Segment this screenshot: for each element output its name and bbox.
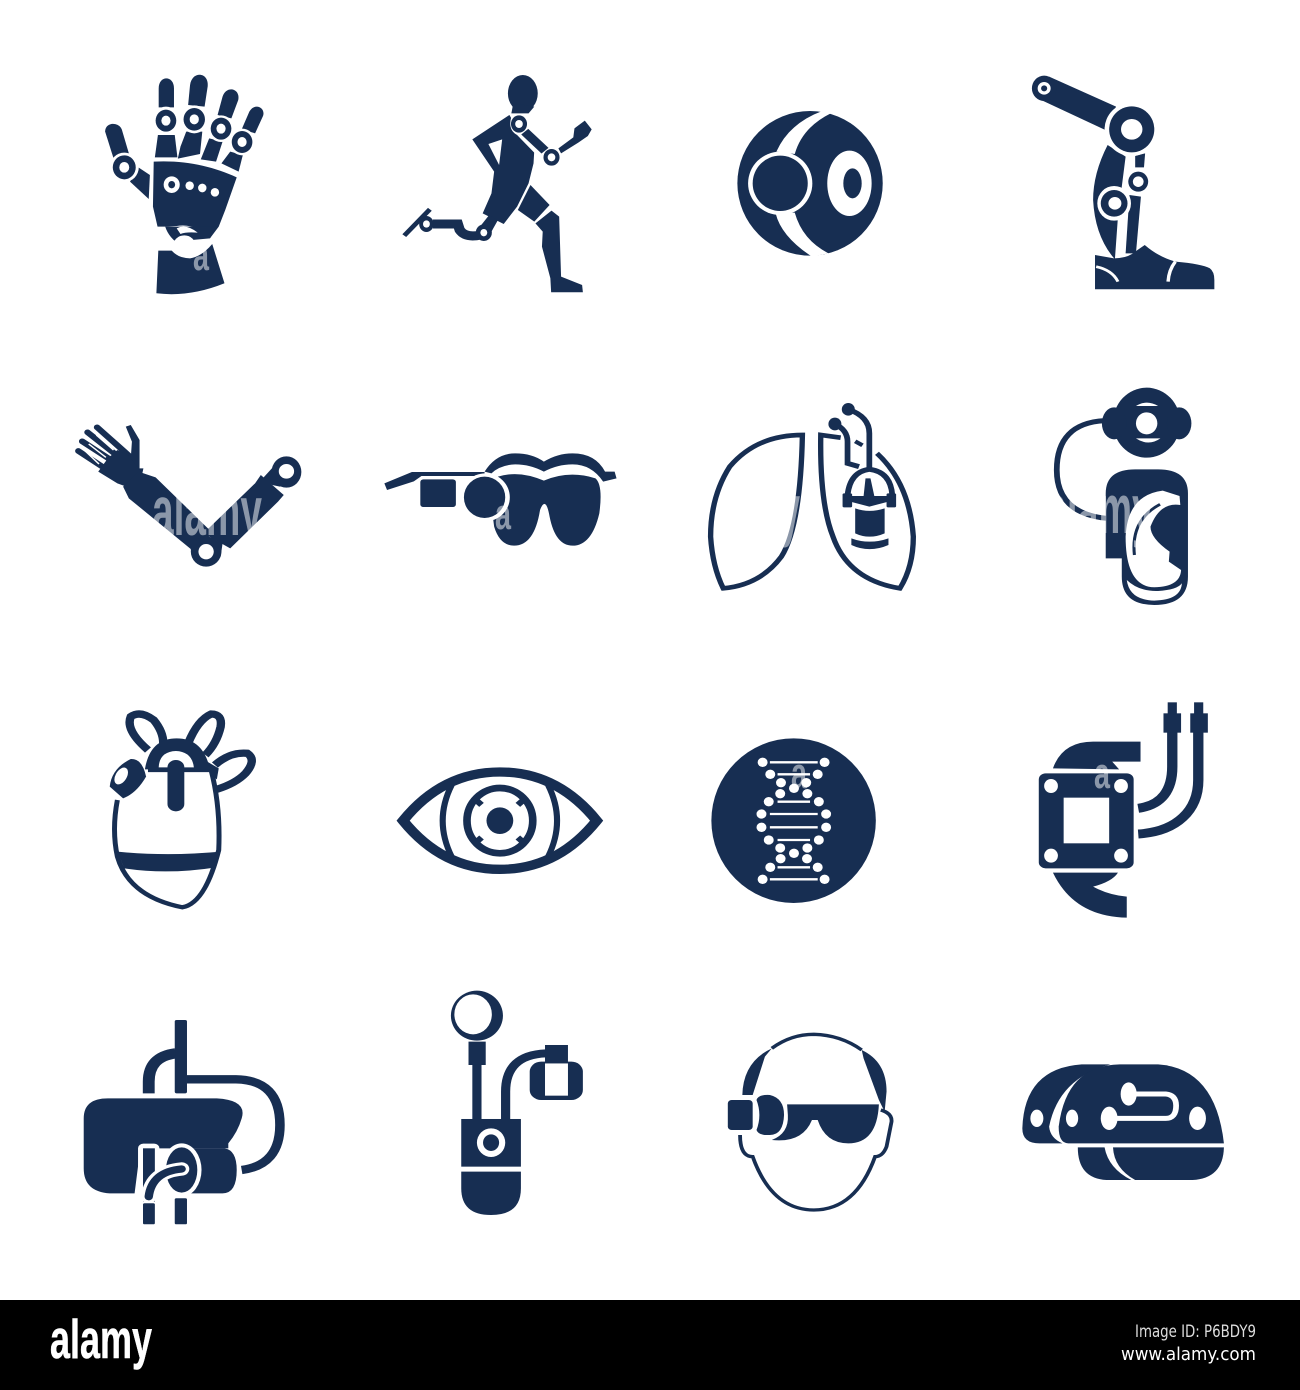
image id: Image ID: P6BDY9 bbox=[1135, 1322, 1256, 1342]
icon: smart helmet bbox=[1022, 1064, 1224, 1180]
website: www.alamy.com bbox=[1121, 1344, 1256, 1365]
watermark overlay: alamy bbox=[1046, 470, 1153, 548]
icon: artificial stomach with tubes bbox=[84, 1020, 280, 1224]
watermark overlay: a bbox=[193, 231, 209, 280]
icon: cochlear implant bbox=[1057, 388, 1191, 605]
watermark overlay: alamy bbox=[152, 472, 262, 550]
icon: artificial heart bbox=[110, 714, 252, 907]
icon: bionic eyeball bbox=[737, 111, 883, 257]
icon: smart glasses bbox=[384, 453, 617, 546]
footer logo: alamy bbox=[50, 1308, 152, 1370]
icon: lungs with implant bbox=[711, 403, 913, 588]
icon: robotic arm bbox=[78, 425, 301, 567]
icon: head with VR visor bbox=[728, 1034, 892, 1210]
icon: prosthetic leg bbox=[1032, 76, 1214, 289]
icon: bionic eye bbox=[403, 772, 597, 869]
watermark overlay: y bbox=[780, 470, 800, 548]
icon: DNA in circle bbox=[711, 738, 876, 903]
footer bar bbox=[0, 1300, 1300, 1390]
icon: pump with cables bbox=[1039, 702, 1208, 918]
watermark overlay: a bbox=[791, 749, 807, 798]
icon: running figure with prosthetics bbox=[404, 75, 592, 292]
watermark overlay: a bbox=[1094, 749, 1110, 798]
watermark overlay: a bbox=[495, 490, 511, 539]
watermark overlay bbox=[152, 231, 1153, 798]
icon: implant device with lead bbox=[451, 991, 583, 1215]
icon: robotic hand bbox=[105, 75, 263, 294]
